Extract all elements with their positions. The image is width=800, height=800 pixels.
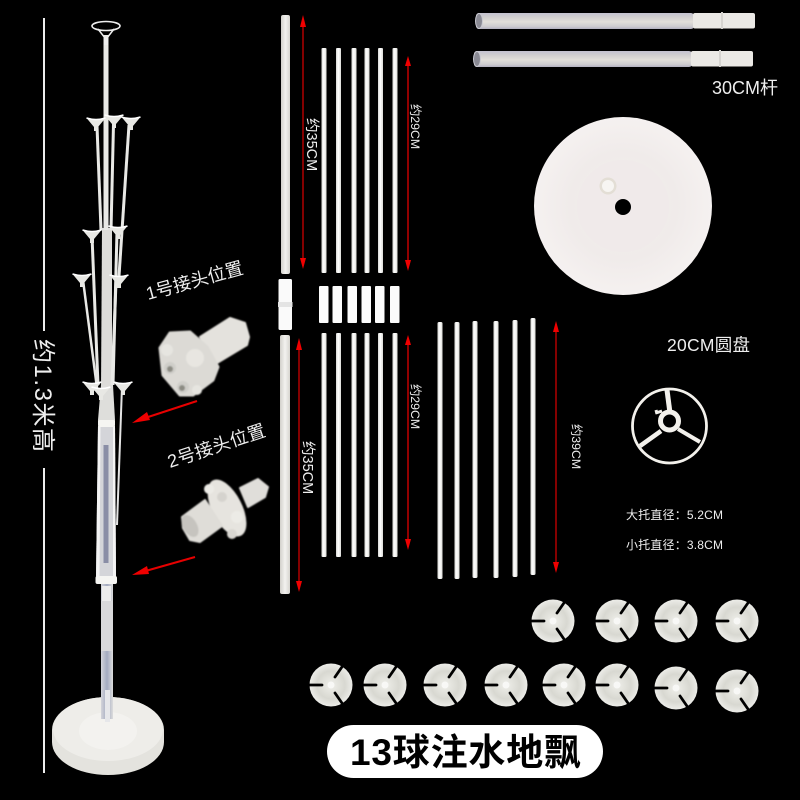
balloon clips: top row <box>531 600 758 642</box>
dimension: 约39CM: 约39CM <box>569 424 584 469</box>
label: 20CM圆盘: 20CM圆盘 <box>667 335 750 355</box>
label: 30CM杆: 30CM杆 <box>712 78 778 98</box>
dimension: upper 约29CM <box>405 56 423 271</box>
label: 2号接头位置: 2号接头位置 <box>165 420 268 472</box>
dimension: lower 约29CM <box>405 335 423 550</box>
dimension: 约39CM <box>553 321 584 573</box>
label: 1号接头位置: 1号接头位置 <box>144 258 245 304</box>
title pill <box>327 725 603 778</box>
balloon holder ring <box>632 389 706 463</box>
dimension: upper 约29CM: 约29CM <box>408 104 423 149</box>
arrow: connector 2 position <box>132 557 195 575</box>
dimension: lower 约35CM <box>296 338 316 592</box>
30CM tube 2 <box>474 50 753 67</box>
base disc <box>534 117 712 295</box>
stand: top cup <box>92 22 120 45</box>
dimension: lower 约29CM: 约29CM <box>408 384 423 429</box>
stand: upper tubes <box>96 228 122 584</box>
balloon clips: bottom row <box>309 664 758 712</box>
upper long rod <box>281 15 290 274</box>
middle coupling <box>278 279 292 330</box>
height dimension: 约1.3米高: 约1.3米高 <box>29 339 56 452</box>
stand: lower tube <box>101 584 113 722</box>
small couplings <box>319 286 400 323</box>
title pill: 13球注水地飘 <box>350 732 581 773</box>
connector 2 <box>178 474 268 542</box>
balloon stand <box>52 22 164 775</box>
stand: balloon cups <box>72 115 140 400</box>
lower thin rods <box>322 333 398 557</box>
dimension: lower 约35CM: 约35CM <box>299 441 316 494</box>
stand: base <box>52 697 164 775</box>
stand: rods <box>83 35 129 388</box>
upper thin rods <box>322 48 398 273</box>
label: large holder diameter: 大托直径：5.2CM <box>626 508 723 522</box>
long thin rods <box>438 318 536 579</box>
30CM tube 1 <box>476 12 755 29</box>
dimension: upper 约35CM <box>300 15 320 269</box>
lower long rod <box>280 335 290 594</box>
label: small holder diameter: 小托直径：3.8CM <box>626 538 723 552</box>
arrow: connector 1 position <box>132 401 197 423</box>
connector 1 <box>160 318 249 395</box>
dimension: upper 约35CM: 约35CM <box>303 118 320 171</box>
